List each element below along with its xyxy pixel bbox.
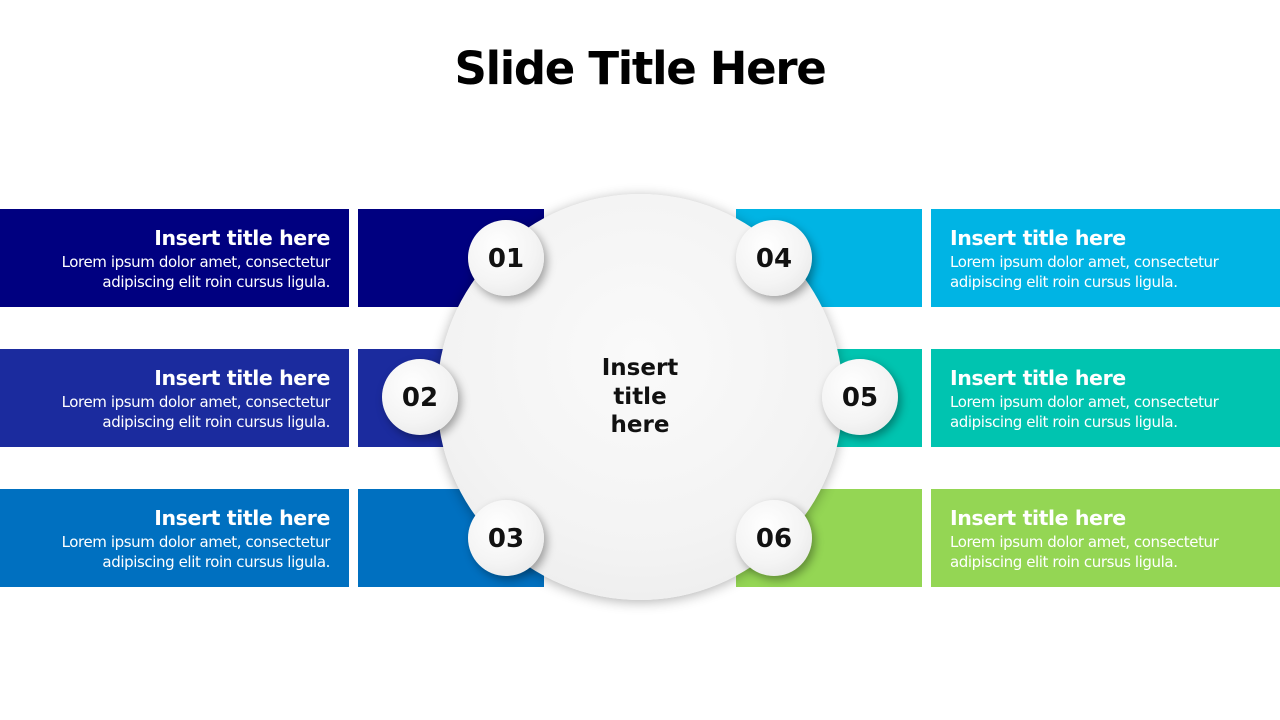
text box 02 bbox=[0, 349, 349, 447]
badge 05: 05 bbox=[842, 383, 878, 413]
text box 01 bbox=[0, 209, 349, 307]
text box 04 bbox=[931, 209, 1280, 307]
text box 03: Lorem ipsum dolor amet, consectetur bbox=[62, 533, 330, 551]
connector 03 bbox=[358, 489, 544, 587]
central circle: here bbox=[611, 412, 669, 438]
text box 06: adipiscing elit roin cursus ligula. bbox=[950, 552, 1178, 570]
badge 01: 01 bbox=[488, 244, 524, 274]
badge 06 bbox=[736, 500, 812, 576]
text box 05: Lorem ipsum dolor amet, consectetur bbox=[950, 393, 1218, 411]
badge 02 bbox=[382, 359, 458, 435]
connector 01 bbox=[358, 209, 544, 307]
badge 06: 06 bbox=[756, 524, 792, 554]
central circle: Insert bbox=[602, 355, 678, 381]
text box 03: Insert title here bbox=[154, 506, 330, 530]
badge 04 bbox=[736, 220, 812, 296]
text box 02: Insert title here bbox=[154, 366, 330, 390]
central circle: title bbox=[613, 384, 667, 410]
text box 05: adipiscing elit roin cursus ligula. bbox=[950, 412, 1178, 430]
text box 04: Insert title here bbox=[950, 226, 1126, 250]
connector 04 bbox=[736, 209, 922, 307]
connector 05 bbox=[736, 349, 922, 447]
badge 03: 03 bbox=[488, 524, 524, 554]
text box 02: adipiscing elit roin cursus ligula. bbox=[102, 412, 330, 430]
central circle bbox=[437, 194, 843, 600]
badge 01 bbox=[468, 220, 544, 296]
text box 01: Lorem ipsum dolor amet, consectetur bbox=[62, 253, 330, 271]
title: Slide Title Here bbox=[454, 42, 826, 95]
text box 01: adipiscing elit roin cursus ligula. bbox=[102, 272, 330, 290]
text box 05 bbox=[931, 349, 1280, 447]
text box 01: Insert title here bbox=[154, 226, 330, 250]
text box 06: Insert title here bbox=[950, 506, 1126, 530]
connector 06 bbox=[736, 489, 922, 587]
badge 03 bbox=[468, 500, 544, 576]
text box 02: Lorem ipsum dolor amet, consectetur bbox=[62, 393, 330, 411]
text box 03 bbox=[0, 489, 349, 587]
text box 03: adipiscing elit roin cursus ligula. bbox=[102, 552, 330, 570]
text box 04: Lorem ipsum dolor amet, consectetur bbox=[950, 253, 1218, 271]
text box 06 bbox=[931, 489, 1280, 587]
text box 04: adipiscing elit roin cursus ligula. bbox=[950, 272, 1178, 290]
text box 05: Insert title here bbox=[950, 366, 1126, 390]
badge 02: 02 bbox=[402, 383, 438, 413]
text box 06: Lorem ipsum dolor amet, consectetur bbox=[950, 533, 1218, 551]
connector 02 bbox=[358, 349, 544, 447]
badge 04: 04 bbox=[756, 244, 792, 274]
badge 05 bbox=[822, 359, 898, 435]
